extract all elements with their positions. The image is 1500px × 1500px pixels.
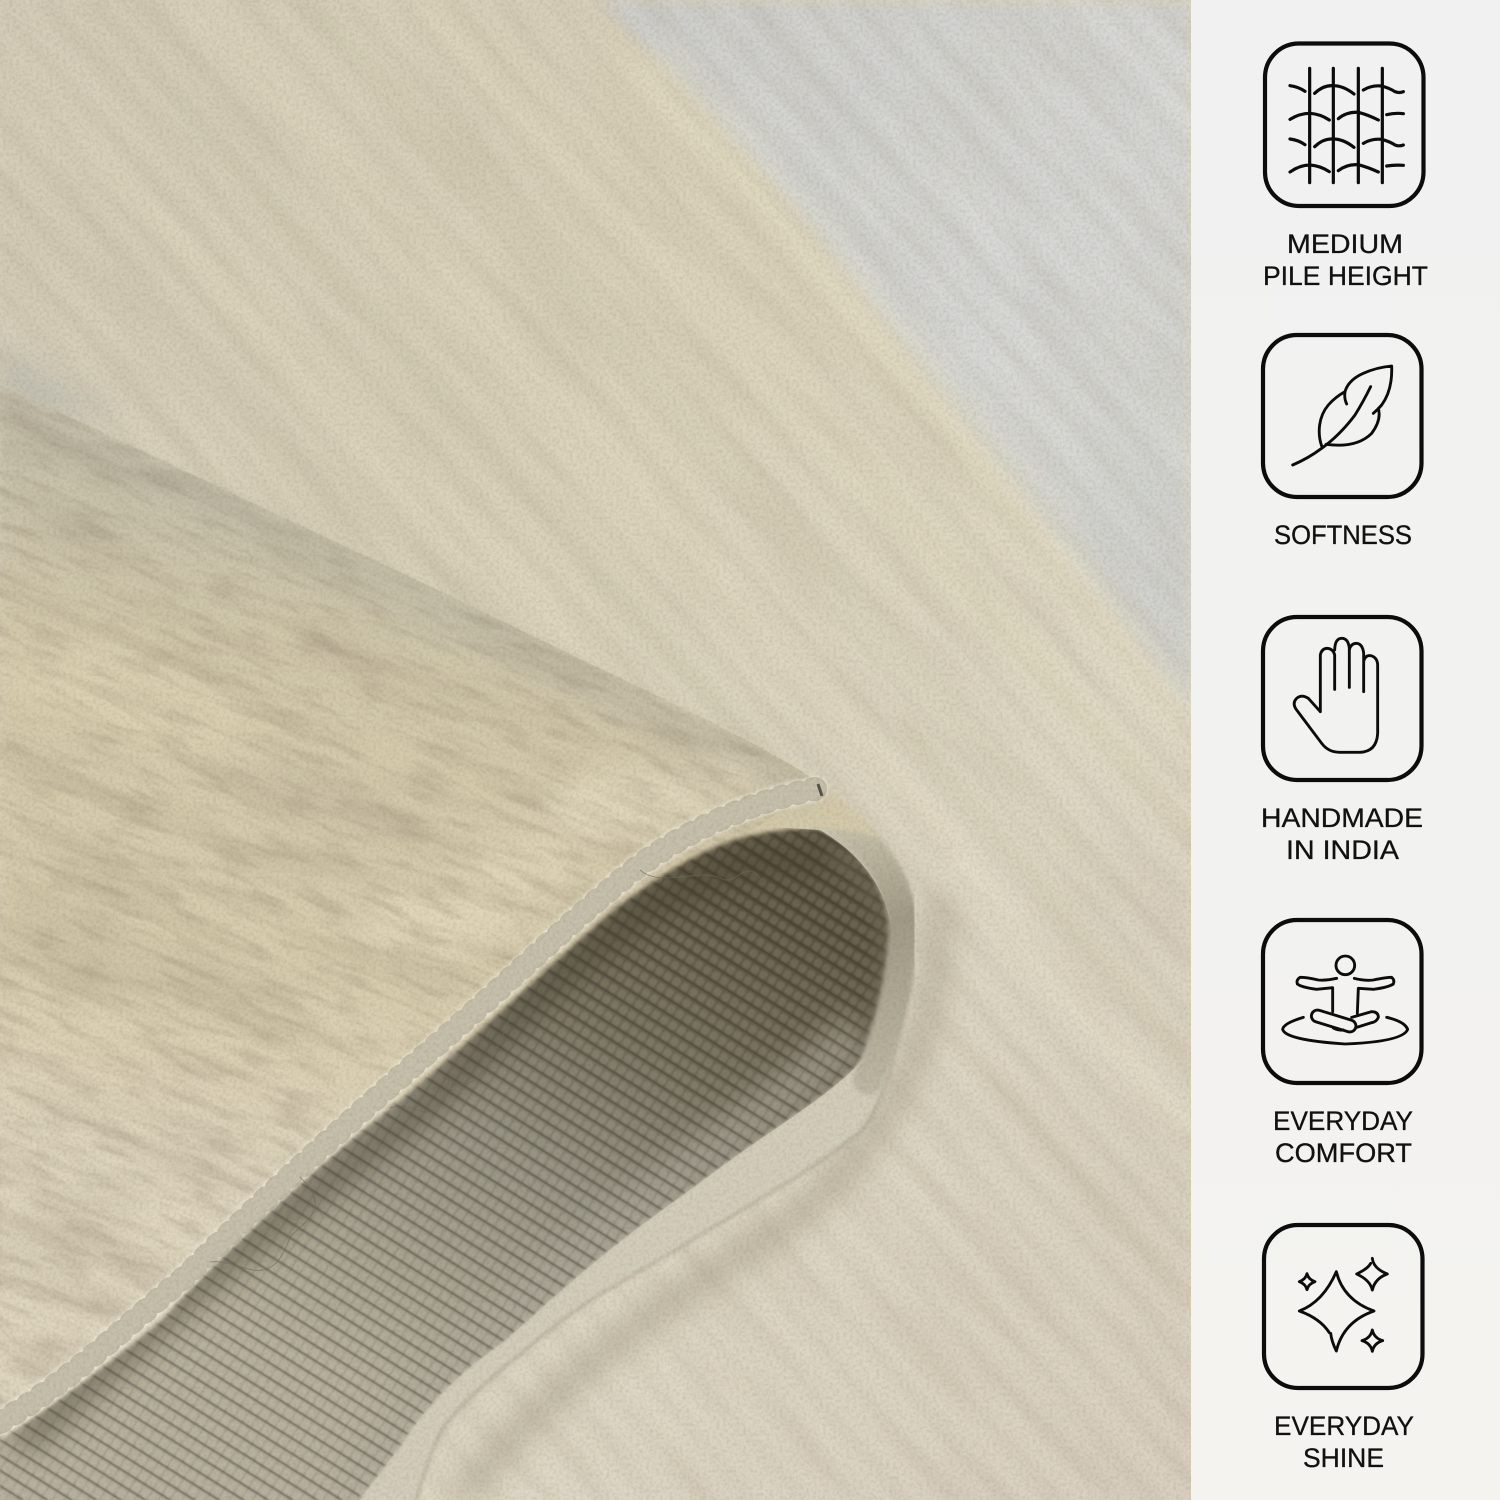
blurred rib stripes on background rug [906,726,1188,1129]
cast shadow around the fold [460,900,937,1500]
label: medium pile height: MEDIUM [1287,229,1403,259]
fine heather flecks [0,385,822,1440]
streaky mottling on background rug [418,36,1191,1500]
fine rib texture on background rug [0,0,1191,1500]
feature: medium pile height [1263,44,1428,291]
icon: feather [1263,335,1422,497]
product photo: rolled rug corner [0,0,1191,1500]
icon: woven pile grid [1265,44,1424,206]
icon: sparkles [1264,1225,1422,1388]
feature: handmade in India [1261,617,1423,865]
white side panel [1191,0,1500,1500]
shade at inside of roll [830,850,885,1045]
label: medium pile height: PILE HEIGHT [1263,261,1428,291]
outer roll of the fold [790,806,903,1080]
feature: softness [1263,335,1422,550]
feature: everyday shine [1264,1225,1422,1473]
label: everyday comfort: EVERYDAY [1273,1106,1413,1136]
label: everyday shine: SHINE [1303,1443,1384,1473]
icon: seated figure on rug [1263,920,1422,1083]
dark shade beneath rope edge [20,860,830,1445]
folded lip of the rug [358,980,905,1500]
mottled streaks on grey floor [610,0,1191,700]
lighter weave along the lip [350,1030,860,1490]
label: everyday shine: EVERYDAY [1274,1411,1414,1441]
icon: open hand [1263,617,1422,780]
bound rope edge [0,789,815,1422]
top face of the fold [0,385,880,1440]
label: everyday comfort: COMFORT [1275,1138,1412,1168]
label: handmade in India: HANDMADE [1261,803,1423,833]
cream rug edge highlight [640,60,1190,725]
label: softness: SOFTNESS [1274,520,1412,550]
rug underside weave [0,825,892,1500]
grey shadow at far left [0,350,95,422]
grey floor behind rug [598,0,1191,715]
mottled blotches on top face [0,385,822,1440]
loose fibres along edge [210,870,760,1270]
label: handmade in India: IN INDIA [1286,835,1399,865]
fabric grain [0,0,1191,1500]
heathered streaks [0,385,822,1440]
background rug [0,0,1191,1500]
dark fleck on rope end [818,784,822,796]
feature: everyday comfort [1263,920,1422,1168]
